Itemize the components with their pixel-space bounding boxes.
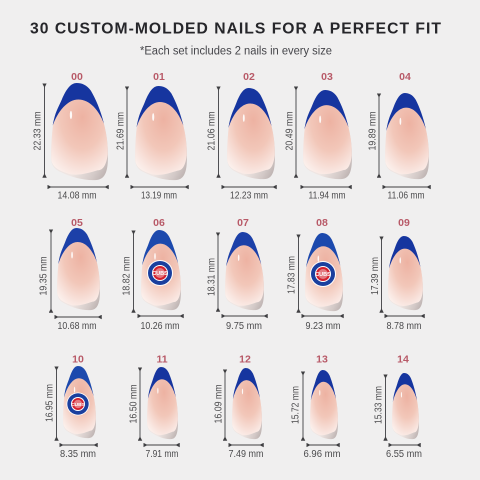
- size 04: 04: [399, 71, 411, 83]
- size 01: [116, 71, 187, 202]
- size 12: 7.49 mm: [228, 449, 264, 460]
- size 05: 19.35 mm: [38, 256, 50, 296]
- size 09: 09: [398, 217, 410, 229]
- size 11: 16.50 mm: [128, 384, 140, 424]
- size 08: 08: [316, 217, 328, 229]
- size 07: 18.31 mm: [206, 258, 218, 296]
- size 02: 02: [243, 71, 255, 83]
- size 03: 11.94 mm: [308, 190, 346, 202]
- title: 30 CUSTOM-MOLDED NAILS FOR A PERFECT FIT: [30, 20, 442, 38]
- size 05: [38, 217, 100, 332]
- icon: team logo: CUBS: [152, 271, 168, 277]
- size 01: 13.19 mm: [141, 190, 177, 202]
- size 12: 12: [239, 354, 251, 366]
- size 10: 8.35 mm: [60, 449, 96, 460]
- size 02: 12.23 mm: [230, 190, 268, 202]
- size 11: 7.91 mm: [146, 449, 178, 460]
- size 08: 9.23 mm: [306, 321, 340, 332]
- size 14: [374, 354, 422, 460]
- size 01: 01: [153, 71, 165, 83]
- size 13: [290, 354, 340, 460]
- size 13: 15.72 mm: [290, 386, 302, 424]
- size 05: 10.68 mm: [58, 321, 96, 332]
- size 08: [286, 217, 343, 332]
- size 10: 16.95 mm: [44, 384, 56, 422]
- size 10: [44, 354, 96, 460]
- size 02: [206, 71, 275, 202]
- size 05: 05: [71, 217, 83, 229]
- size 01: 21.69 mm: [116, 112, 126, 150]
- subtitle: *Each set includes 2 nails in every size: [140, 46, 332, 58]
- size 00: [32, 71, 108, 202]
- size 03: 03: [321, 71, 333, 83]
- size 07: [206, 217, 264, 332]
- size 09: [370, 217, 423, 332]
- size 11: 11: [156, 354, 168, 366]
- size 00: 00: [71, 71, 83, 83]
- icon: team logo: CUBS: [71, 402, 86, 408]
- size 07: 9.75 mm: [226, 321, 262, 332]
- size 02: 21.06 mm: [206, 112, 218, 150]
- size 06: 06: [153, 217, 165, 229]
- size 11: [128, 354, 178, 460]
- size 04: 19.89 mm: [368, 112, 378, 150]
- size 09: 17.39 mm: [370, 257, 381, 295]
- size 04: [368, 71, 429, 202]
- size 13: 13: [316, 354, 328, 366]
- size 09: 8.78 mm: [386, 321, 422, 332]
- size 08: 17.83 mm: [286, 256, 298, 294]
- size 12: [214, 354, 264, 460]
- size 14: 15.33 mm: [374, 386, 384, 424]
- size 03: [284, 71, 352, 202]
- size 06: 18.82 mm: [122, 256, 132, 296]
- size 10: 10: [72, 354, 84, 366]
- icon: team logo: CUBS: [315, 272, 331, 278]
- size 03: 20.49 mm: [284, 112, 296, 150]
- size 00: 22.33 mm: [32, 112, 44, 150]
- size 14: 6.55 mm: [386, 449, 422, 460]
- size 06: 10.26 mm: [140, 321, 180, 332]
- size 14: 14: [397, 354, 409, 366]
- size 12: 16.09 mm: [214, 384, 224, 424]
- size 04: 11.06 mm: [388, 190, 424, 202]
- size 13: 6.96 mm: [304, 449, 340, 460]
- size 07: 07: [237, 217, 249, 229]
- size 00: 14.08 mm: [58, 190, 96, 202]
- size 06: [122, 217, 181, 332]
